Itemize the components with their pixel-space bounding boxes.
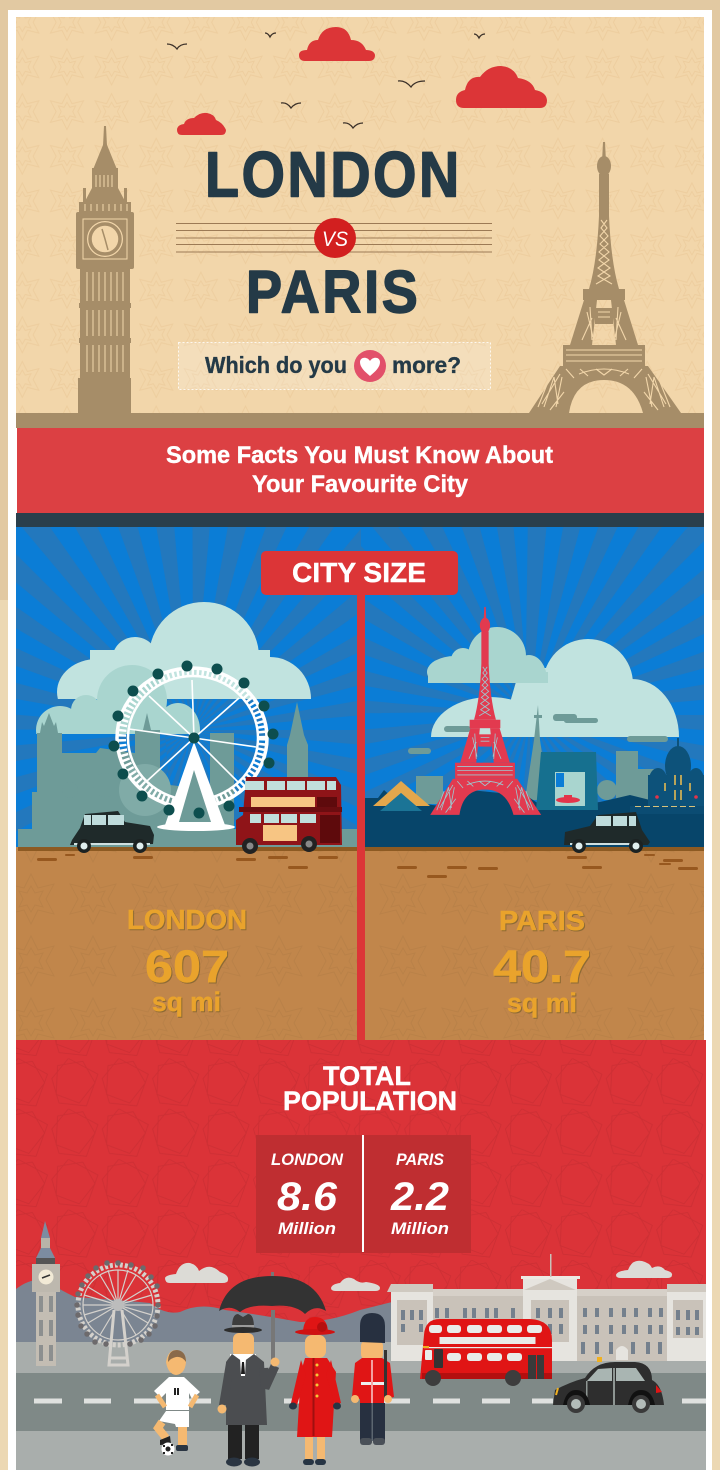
icon: small London Eye [77,1263,158,1365]
mountains [16,1280,400,1345]
grey clouds [165,1261,672,1291]
tagline box: more? [392,352,461,378]
banner: some facts: Some Facts You Must Know About [166,442,553,469]
icon: black taxi left [70,811,154,853]
panel: total population [16,1040,706,1340]
heading tag: city size [261,551,458,595]
stat: London area: 607 [145,941,229,992]
stat: London area [127,904,247,1017]
icon: heart [354,350,386,382]
icon: birds [167,33,485,128]
title: London: LONDON [205,139,462,210]
stat box: population numbers: 2.2 [390,1175,449,1219]
stat: Paris area [493,905,591,1018]
figure: royal guard [351,1313,394,1445]
icon: Sacre Coeur [630,738,704,814]
centre divider line [357,595,365,1040]
icon: Big Ben silhouette [76,126,134,413]
heading tag: city size: CITY SIZE [292,557,426,588]
figure: boy footballer [154,1350,200,1456]
dark strip [16,513,704,527]
stat box: population numbers: LONDON [271,1150,344,1169]
stat box: population numbers [256,1135,471,1253]
heading: total population [283,1061,457,1116]
icon: black cab [553,1357,664,1413]
panel: city size Paris [361,527,704,853]
panel: hero header [16,17,704,413]
palace [387,1254,706,1361]
stat: Paris area: sq mi [507,988,577,1018]
icon: red Eiffel Tower [430,607,541,815]
title: Paris: PARIS [246,259,420,326]
divider lines with VS badge: VS [322,228,348,251]
icon: small Big Ben [32,1221,60,1366]
tagline box [178,342,490,390]
road marks [37,854,698,878]
London skyline silhouette [18,702,357,847]
icon: red bus [420,1319,552,1386]
Paris back buildings [416,705,660,804]
illustration: London street scene [16,1221,706,1470]
icon: La Defense arch [536,752,598,810]
figure: man with umbrella [218,1272,326,1466]
pavement, road and foreground [16,1342,706,1470]
panel: brown ground with city stats [16,847,704,1040]
back cloud [57,602,311,699]
icon: Eiffel Tower silhouette [529,142,681,413]
front cloud [36,665,200,734]
front cloud [427,627,548,683]
stat box: population numbers: PARIS [396,1150,445,1169]
icon: Louvre pyramid [373,781,430,811]
heading: total population: POPULATION [283,1086,457,1116]
banner: some facts: Your Favourite City [252,471,469,498]
ground strip [16,413,704,428]
banner: some facts [17,428,704,513]
panel: city size London [16,527,361,854]
stat box: population numbers: 8.6 [277,1175,338,1219]
stat box: population numbers: Million [278,1219,336,1238]
icon: red clouds [177,27,547,135]
figure: lady in red [289,1317,341,1465]
tagline box: Which do you [205,352,347,378]
Paris ground silhouette [365,790,704,847]
icon: double decker bus [236,777,342,854]
stat: London area: LONDON [127,904,247,935]
icon: London Eye [108,660,278,831]
back cloud [431,639,679,737]
stat: Paris area: 40.7 [493,941,591,992]
stat box: population numbers: Million [391,1219,449,1238]
heading: total population: TOTAL [323,1061,411,1091]
icon: black taxi right [564,812,650,853]
grey cloud streaks [408,714,668,754]
stat: London area: sq mi [152,987,221,1017]
divider lines with VS badge [176,218,492,258]
stat: Paris area: PARIS [499,905,585,936]
